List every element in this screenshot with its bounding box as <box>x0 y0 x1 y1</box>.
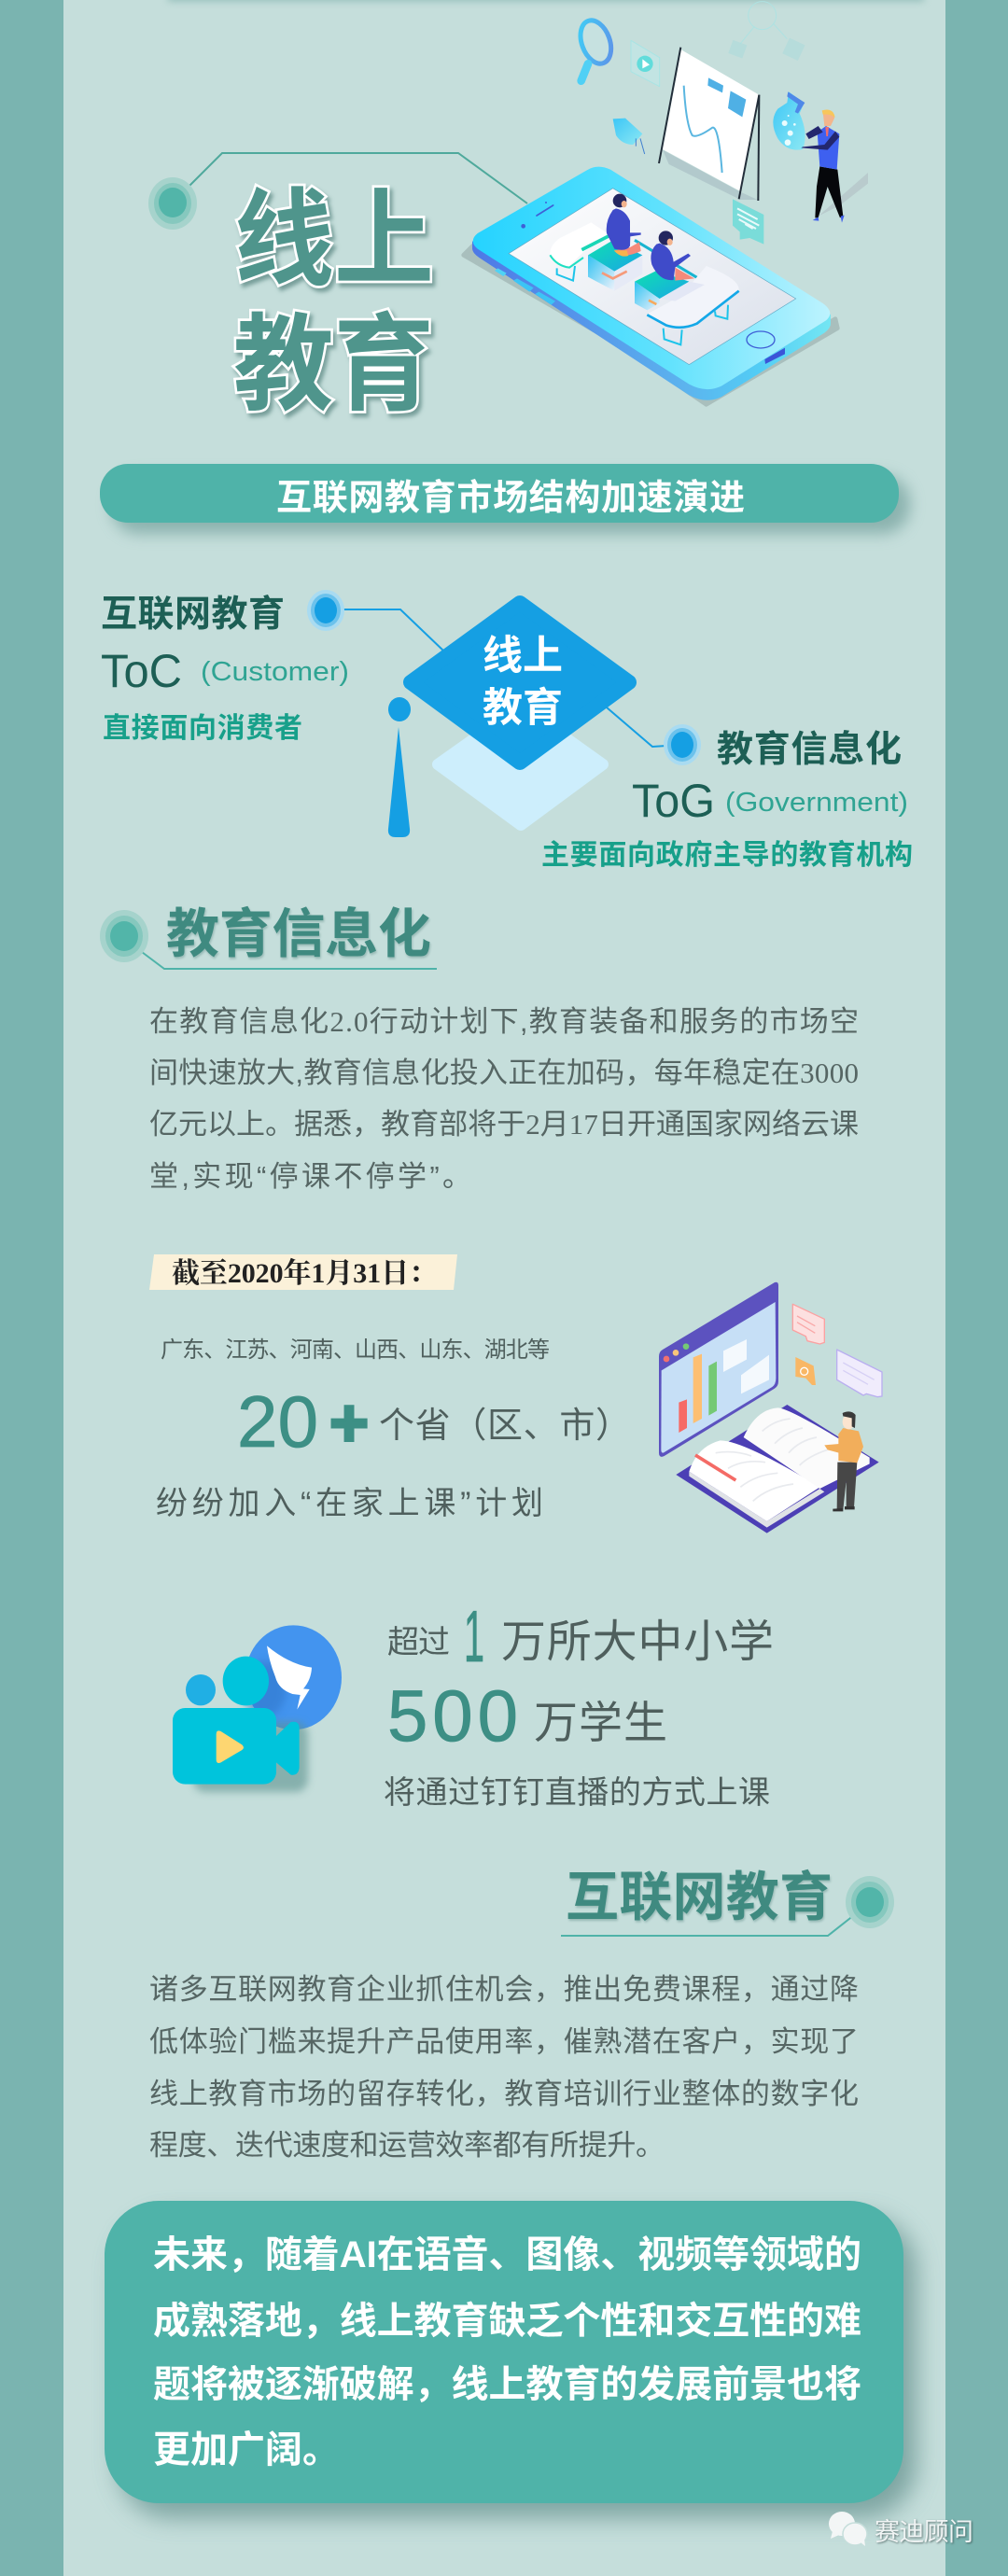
paragraph: education informatization <box>149 1005 859 1193</box>
paragraph: education informatization: 堂,实现“停课不停学”。 <box>149 1160 471 1193</box>
date tag: 截至2020年1月31日： <box>172 1258 437 1289</box>
stat: DingTalk live classes <box>384 1595 774 1811</box>
paragraph: internet education: 低体验门槛来提升产品使用率，催熟潜在客户，实现了 <box>149 2025 859 2058</box>
ToC text block: 直接面向消费者 <box>103 713 302 744</box>
stat: provinces joining: + <box>329 1386 369 1461</box>
floating chat icons <box>792 1304 882 1397</box>
illustration: smartphone with students <box>464 167 837 404</box>
ToG text block <box>541 730 913 871</box>
reader figure <box>824 1411 863 1511</box>
ToC text block: ToC <box>101 645 182 697</box>
diamond label: 线上 <box>483 634 563 679</box>
ToG text block: 教育信息化 <box>717 730 902 770</box>
paragraph: education informatization: 间快速放大,教育信息化投入正在加码，每年稳定在3000 <box>149 1057 859 1089</box>
callout: outlook: 成熟落地，线上教育缺乏个性和交互性的难 <box>153 2301 861 2342</box>
paragraph: internet education: 诸多互联网教育企业抓住机会，推出免费课程，通过降 <box>149 1973 859 2006</box>
stat: DingTalk live classes: 500 <box>387 1674 518 1757</box>
ToG text block: 主要面向政府主导的教育机构 <box>541 840 913 871</box>
classroom desk left <box>550 222 707 283</box>
watermark <box>829 2512 973 2546</box>
banner: market structure heading <box>100 464 910 534</box>
stat: provinces joining <box>156 1337 631 1521</box>
section heading: education informatization: 教育信息化 <box>166 904 431 964</box>
stat: DingTalk live classes: 1 <box>464 1595 484 1677</box>
icon: faint network diagram <box>728 2 805 61</box>
ToG text block: (Government) <box>725 788 908 818</box>
callout: outlook: 更加广阔。 <box>153 2429 340 2471</box>
diamond label: 教育 <box>483 686 563 731</box>
diagram: ToC and ToG around graduation cap <box>101 590 913 871</box>
stat: DingTalk live classes: 超过 <box>387 1625 450 1660</box>
stat: provinces joining: 广东、江苏、河南、山西、山东、湖北等 <box>161 1337 550 1363</box>
watermark: 赛迪顾问 <box>875 2518 973 2546</box>
icon: graduation cap <box>613 119 645 154</box>
paragraph: internet education: 线上教育市场的留存转化，教育培训行业整体的数字化 <box>149 2078 859 2110</box>
ToG text block: ToG <box>632 775 715 827</box>
paragraph: internet education: 程度、迭代速度和运营效率都有所提升。 <box>149 2129 665 2162</box>
paragraph: internet education <box>149 1973 859 2162</box>
stat: provinces joining: 20 <box>237 1380 318 1463</box>
section heading: internet education: 互联网教育 <box>566 1868 833 1927</box>
banner: market structure heading: 互联网教育市场结构加速演进 <box>276 479 745 518</box>
browser window <box>659 1282 778 1457</box>
title connector line <box>148 153 527 230</box>
callout: outlook: 未来，随着AI在语音、图像、视频等领域的 <box>153 2234 861 2275</box>
seat cubes <box>588 240 705 310</box>
main title: 线上 <box>234 181 434 299</box>
student one <box>607 194 641 257</box>
paragraph: education informatization: 亿元以上。据悉，教育部将于2月17日开通国家网络云课 <box>149 1108 859 1141</box>
diamond label <box>483 634 563 731</box>
icon: camera with DingTalk logo <box>173 1625 342 1792</box>
icon: chat logo <box>829 2512 867 2546</box>
desk right <box>647 266 739 344</box>
connector lines <box>326 609 681 747</box>
icon: chat bubble <box>733 199 763 245</box>
icon: video card <box>631 40 660 87</box>
paragraph: education informatization: 在教育信息化2.0行动计划下,教育装备和服务的市场空 <box>149 1005 859 1038</box>
icon: magnifier <box>575 16 617 81</box>
illustration: browser window and open book <box>659 1282 882 1533</box>
main title: 教育 <box>233 306 434 424</box>
whiteboard <box>659 48 759 201</box>
illustration: whiteboard, presenter and floating icons <box>575 2 868 245</box>
callout: outlook: 题将被逐渐破解，线上教育的发展前景也将 <box>153 2364 861 2405</box>
cap tassel <box>388 697 411 837</box>
presenter with flask <box>773 91 868 223</box>
stat: provinces joining: 个省（区、市） <box>379 1407 631 1446</box>
student two <box>651 231 694 281</box>
open book <box>676 1405 879 1533</box>
blue dot right <box>664 724 701 765</box>
lower cap diamond <box>438 706 603 825</box>
ToC text block: (Customer) <box>201 657 349 687</box>
stat: DingTalk live classes: 万所大中小学 <box>501 1617 774 1667</box>
main title <box>233 181 434 424</box>
callout: outlook <box>105 2201 917 2518</box>
stat: DingTalk live classes: 将通过钉钉直播的方式上课 <box>384 1775 770 1811</box>
ToC text block: 互联网教育 <box>101 595 285 635</box>
upper cap diamond <box>411 603 629 763</box>
stat: provinces joining: 纷纷加入“在家上课”计划 <box>156 1486 543 1521</box>
blue dot left <box>307 590 344 631</box>
top card shadow <box>168 0 924 2</box>
ToC text block <box>101 595 349 744</box>
stat: DingTalk live classes: 万学生 <box>534 1698 667 1747</box>
